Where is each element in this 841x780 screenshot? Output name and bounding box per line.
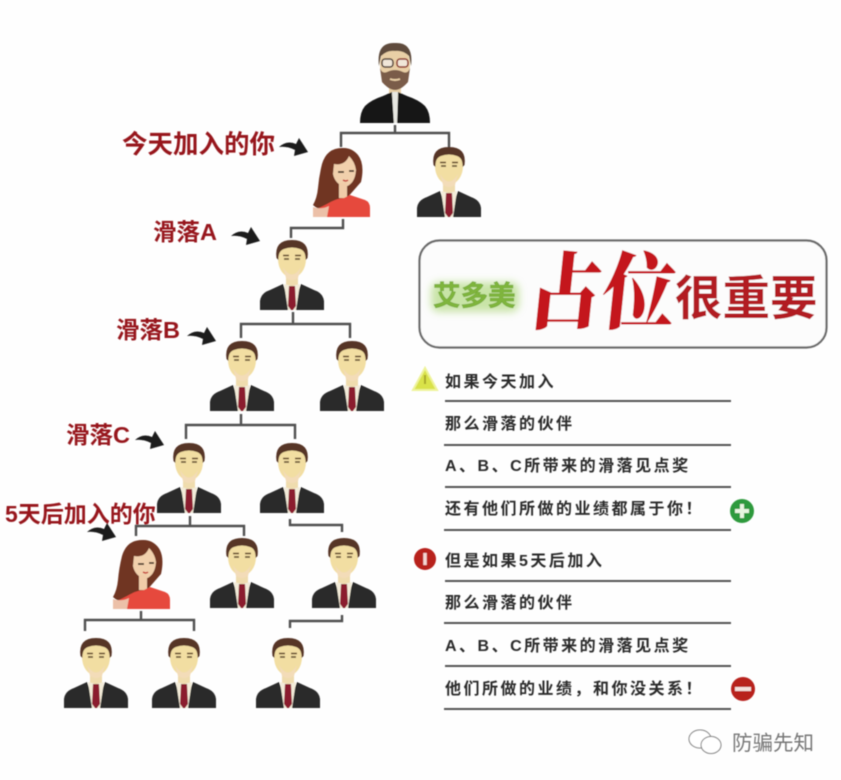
person: spillover A [260, 240, 324, 310]
label: spillover C: 滑落C [66, 422, 130, 448]
label: joining today: 今天加入的你 [122, 131, 275, 159]
banner title end: 很重要 [675, 273, 818, 326]
icon: green plus [730, 499, 754, 523]
label: spillover B: 滑落B [116, 317, 180, 343]
text: performance unrelated to you: 他们所做的业绩，和你没关系！ [445, 679, 704, 698]
text: performance belongs to you: 还有他们所做的业绩都属于你！ [445, 499, 704, 518]
icon: red exclamation [414, 548, 436, 570]
person: partner of the woman [417, 147, 481, 217]
arrow: spillover B [187, 327, 216, 345]
banner big title: 占位 [524, 248, 681, 341]
watermark: WeChat icon [689, 730, 721, 754]
person: woman, you joining today [313, 148, 370, 217]
text: spillover partners: 那么滑落的伙伴 [445, 415, 575, 433]
person: level five middle [210, 538, 274, 608]
text: spillover partners second: 那么滑落的伙伴 [445, 594, 575, 612]
person: level four right [260, 443, 324, 513]
icon: warning triangle [413, 368, 437, 390]
person: woman, you joining after five days [113, 540, 170, 609]
arrow: joining five days later [87, 523, 116, 541]
person: bottom right [256, 638, 320, 708]
text: spillover bonus second: A、B、C所带来的滑落见点奖 [445, 636, 691, 655]
person: level five right [312, 538, 376, 608]
tree connector lines [85, 125, 449, 631]
label: spillover A: 滑落A [153, 219, 217, 245]
text: spillover bonus: A、B、C所带来的滑落见点奖 [445, 456, 691, 475]
text: if you join today: 如果今天加入 [445, 372, 556, 391]
label: joining five days later: 5天后加入的你 [5, 501, 156, 527]
person: bottom left [64, 638, 128, 708]
banner glow behind brand name [431, 282, 519, 312]
arrow: spillover A [231, 227, 260, 245]
arrow: spillover C [135, 431, 164, 449]
arrow: joining today [279, 138, 308, 156]
person: level three right [320, 341, 384, 411]
person: spillover B [210, 341, 274, 411]
watermark: account name: 防骗先知 [732, 732, 814, 755]
person: top leader with glasses and beard [360, 43, 430, 123]
icon: red minus [731, 677, 755, 701]
person: bottom middle [152, 638, 216, 708]
person: spillover C [157, 443, 221, 513]
banner brand name: 艾多美 [433, 280, 516, 311]
text: but if joining after five days: 但是如果5天后加入 [445, 552, 604, 570]
panel: banner [420, 240, 826, 348]
